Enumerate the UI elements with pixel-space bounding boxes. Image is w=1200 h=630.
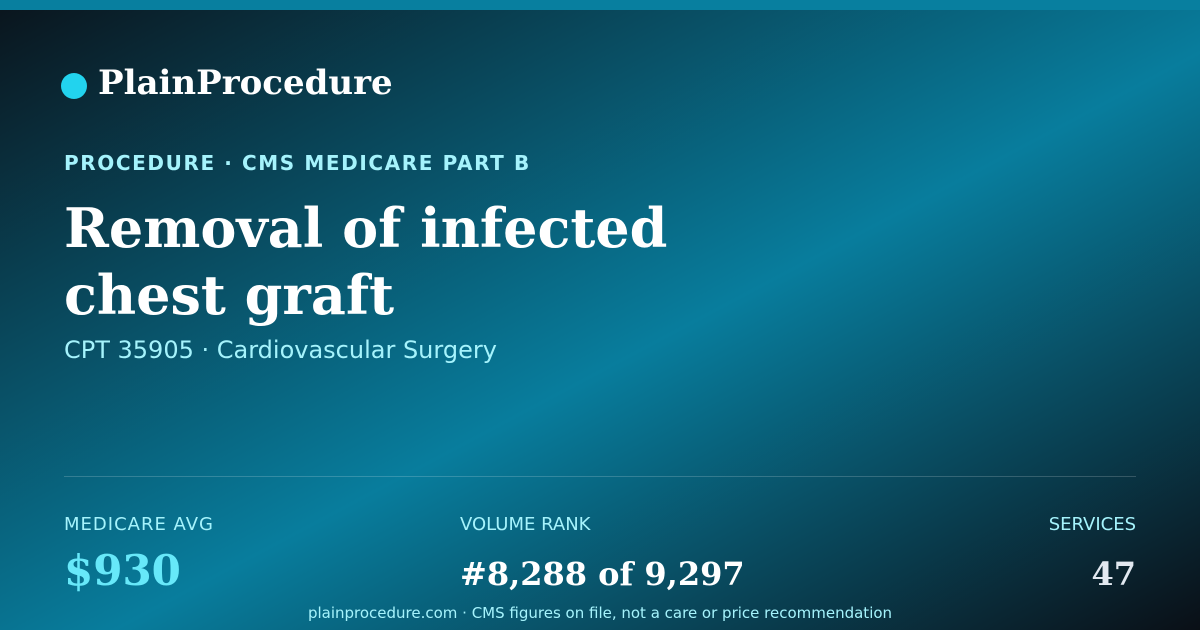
stat: services	[1049, 514, 1136, 593]
title: chest graft	[64, 263, 394, 327]
stat label: MEDICARE AVG	[64, 514, 214, 535]
stats divider	[64, 476, 1136, 477]
stat label: VOLUME RANK	[460, 514, 590, 535]
stat value: $930	[64, 546, 181, 595]
title: Removal of infected	[64, 196, 667, 260]
stat value: #8,288 of 9,297	[460, 555, 745, 593]
title	[64, 196, 667, 327]
brand name: PlainProcedure	[98, 63, 393, 103]
stat value: 47	[1091, 555, 1136, 593]
top accent bar	[0, 0, 1200, 10]
icon: brand dot	[61, 73, 87, 99]
eyebrow label: PROCEDURE · CMS MEDICARE PART B	[64, 151, 531, 175]
footer note: plainprocedure.com · CMS figures on file, not a care or price recommendation	[308, 604, 892, 622]
stat: medicare average	[64, 514, 214, 595]
stat label: SERVICES	[1049, 514, 1136, 535]
brand logo	[61, 63, 393, 103]
stat: volume rank	[460, 514, 745, 593]
subtitle: CPT 35905 · Cardiovascular Surgery	[64, 336, 497, 364]
